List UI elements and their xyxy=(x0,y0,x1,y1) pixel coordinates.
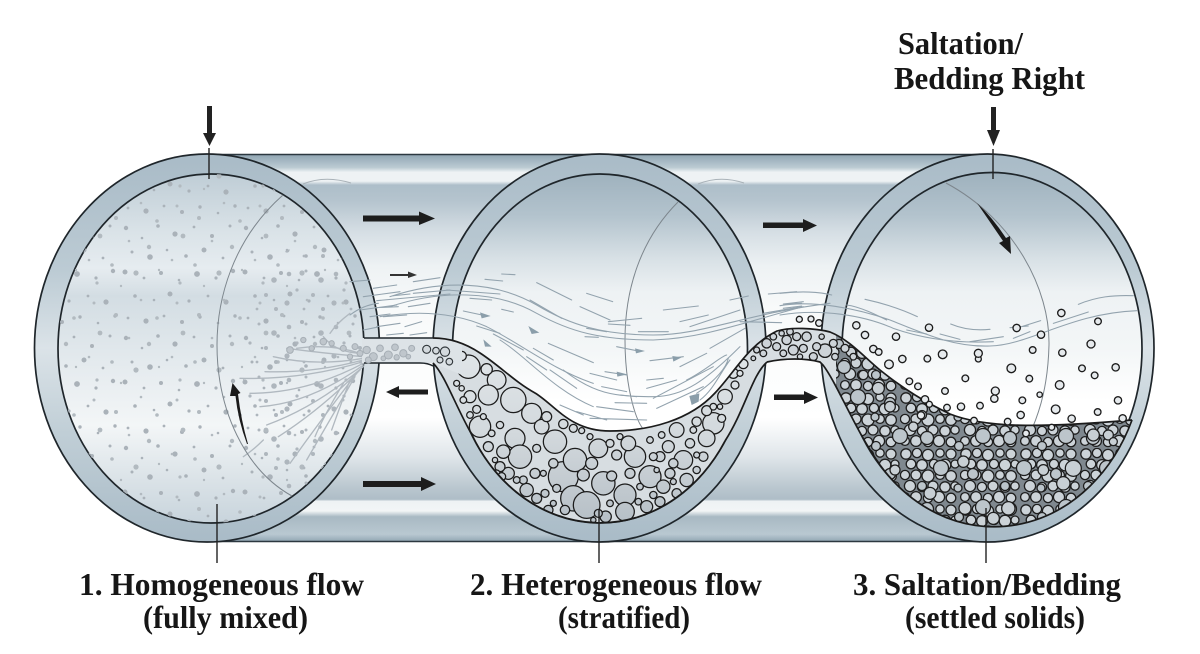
meridian arcs on the pipe wall xyxy=(217,179,1049,496)
bed surface outline xyxy=(433,328,1132,527)
arrow: lower flow 2 xyxy=(774,391,818,404)
arrow: pointer to section 3 xyxy=(987,107,1000,179)
arrow: upper flow 1 xyxy=(363,212,435,225)
sediment bed fill xyxy=(433,328,1132,527)
leader line: label 1 xyxy=(216,504,218,563)
arrow: curved section 1 xyxy=(230,383,248,444)
solids hump between sections 2 and 3 xyxy=(751,328,857,361)
label: homogeneous flow: 1. Homogeneous flow xyxy=(79,566,364,602)
large solids: section 2 xyxy=(454,351,748,523)
streaks fanning from the neck: section 1 xyxy=(240,313,363,463)
pipe section 2 ring xyxy=(433,154,766,542)
leader line: label 2 xyxy=(598,510,600,563)
pipe body xyxy=(210,154,995,542)
heading: Saltation/Bedding Right: Bedding Right xyxy=(894,60,1085,96)
arrow: pointer to section 1 xyxy=(203,106,216,179)
pipe section 1 ring xyxy=(34,154,380,542)
label: homogeneous flow: (fully mixed) xyxy=(143,599,308,635)
arrow: return flow xyxy=(386,386,428,398)
flow direction markers xyxy=(480,312,699,405)
label: heterogeneous flow: (stratified) xyxy=(558,599,690,635)
pipe section 3 ring xyxy=(821,154,1154,542)
suspended particles: section 1 xyxy=(58,174,367,523)
arrow: small flow xyxy=(390,272,417,278)
heading: Saltation/Bedding Right xyxy=(894,25,1085,96)
flow lines: section 3 xyxy=(780,292,1137,346)
label: saltation/bedding xyxy=(853,566,1121,635)
settled solids: section 3 xyxy=(818,330,1146,530)
label: saltation/bedding: (settled solids) xyxy=(905,599,1085,635)
arrow: upper flow 2 xyxy=(763,219,817,232)
label: homogeneous flow xyxy=(79,566,364,635)
heading: Saltation/Bedding Right: Saltation/ xyxy=(898,25,1024,61)
stratified flow lines xyxy=(350,274,830,420)
neck solids between sections 1 and 2 xyxy=(287,337,462,375)
arrow: lower flow 1 xyxy=(363,477,436,491)
label: heterogeneous flow xyxy=(470,566,762,635)
label: heterogeneous flow: 2. Heterogeneous flow xyxy=(470,566,762,602)
leader line: label 3 xyxy=(985,508,987,563)
suspended solids: section 3 xyxy=(796,309,1126,437)
flow lines between section 1 and section 2 xyxy=(350,278,450,335)
arrow: curved section 3 xyxy=(977,203,1011,254)
label: saltation/bedding: 3. Saltation/Bedding xyxy=(853,566,1121,602)
